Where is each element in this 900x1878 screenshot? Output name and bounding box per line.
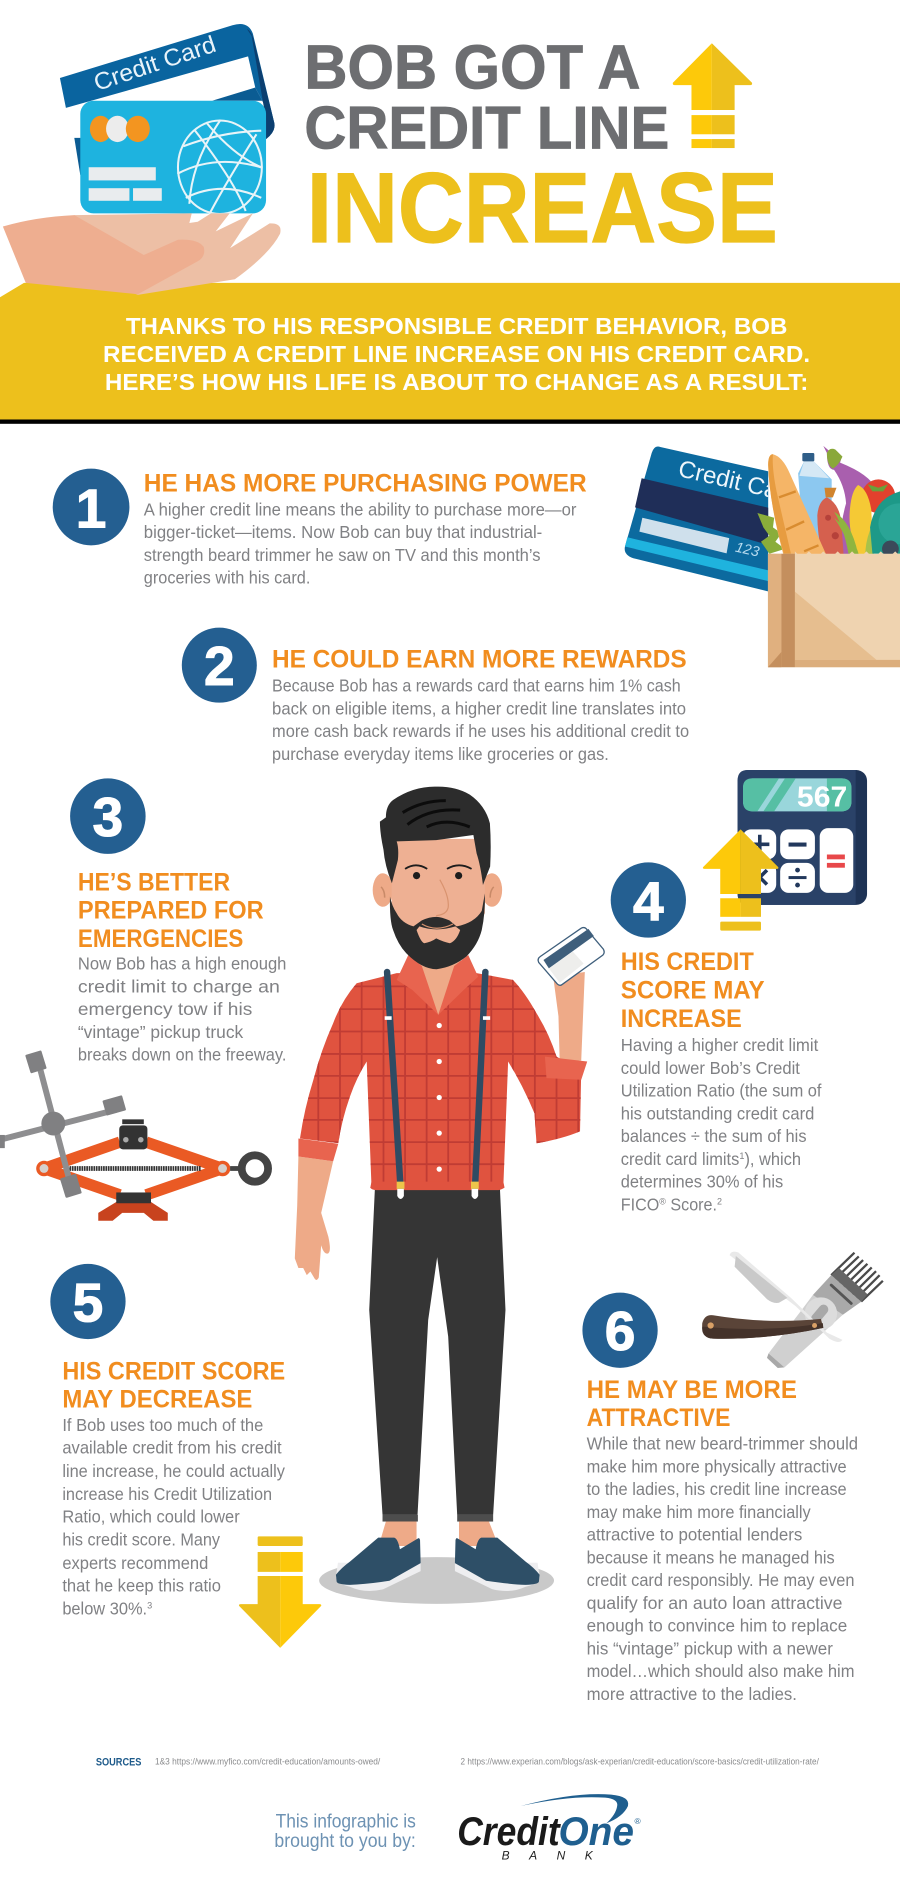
jack [36,1119,268,1221]
body text 6: model…which should also make him [587,1661,854,1681]
body text 1: groceries with his card. [144,568,310,588]
number badge 1: 1 [76,477,106,539]
nose [436,880,448,916]
body text 1: A higher credit line means the ability to purchase more—or [144,499,577,519]
heading 4: SCORE MAY [621,977,765,1004]
brought to you by: This infographic is [276,1811,416,1833]
title: BOB GOT A [304,34,641,103]
body text 5: increase his Credit Utilization [62,1484,272,1504]
sources [96,1756,819,1768]
body text 4: Score. [666,1194,717,1214]
body text 5: available credit from his credit [62,1438,282,1458]
panel: 3 emergencies [70,778,286,1065]
grocery credit card: Credit Card [676,455,801,509]
heading 4 [621,949,765,1033]
body text 4: Utilization Ratio (the sum of [621,1081,822,1101]
grocery credit card [624,446,768,592]
body text 5: below 30%. [62,1598,151,1618]
body text 6: more attractive to the ladies. [587,1684,797,1704]
body text 6: to the ladies, his credit line increase [587,1479,847,1499]
body text 4: 1 [739,1151,744,1162]
heading 6: HE MAY BE MORE [587,1377,797,1404]
body text 6: credit card responsibly. He may even [587,1570,854,1590]
body text 2: purchase everyday items like groceries or gas. [272,744,609,764]
body text 3: credit limit to charge an [78,976,280,996]
panel: 1 purchasing power [53,469,587,588]
body text 4: 2 [717,1196,722,1207]
neck [413,947,461,1015]
heading 6 [587,1377,797,1432]
icon: title up arrow [673,43,752,148]
logo: Credit One Bank: One [558,1810,634,1854]
body text 6: may make him more financially [587,1502,811,1522]
body text 5: If Bob uses too much of the [62,1415,263,1435]
heading 5: HIS CREDIT SCORE [62,1358,285,1385]
body text 4: his outstanding credit card [621,1103,814,1123]
razor [702,1252,842,1342]
body text 5: his credit score. Many [62,1530,220,1550]
icon: score up arrow [703,829,778,931]
body text 5: experts recommend [62,1553,208,1573]
body text 6 [587,1434,858,1704]
head [373,787,502,969]
number badge 3: 3 [93,786,123,848]
icon: razor and beard trimmer [702,1252,883,1368]
icon: calculator [738,770,867,905]
body text 4: FICO [621,1194,662,1214]
body text 2: back on eligible items, a higher credit line translates into [272,698,686,718]
icon: scissor jack and lug wrench [0,1050,268,1221]
logo: Credit One Bank: Credit [457,1810,561,1854]
intro text: HERE’S HOW HIS LIFE IS ABOUT TO CHANGE AS A RESULT: [105,369,808,395]
heading 6: ATTRACTIVE [587,1405,730,1432]
hand [3,213,281,295]
hair [380,787,491,885]
collar [397,955,478,1015]
heading 3: EMERGENCIES [78,926,243,953]
number badge 2: 2 [204,635,235,697]
body text 6: because it means he managed his [587,1547,835,1567]
sources: 2 https://www.experian.com/blogs/ask-experian/credit-education/score-basics/credit-utilization-rate/ [461,1757,819,1768]
heading 4: INCREASE [621,1006,742,1033]
body text 6: make him more physically attractive [587,1456,847,1476]
number badge 4: 4 [633,870,664,932]
body text 4: ® [659,1196,666,1207]
logo: Credit One Bank: BANK [502,1848,594,1862]
heading 1: HE HAS MORE PURCHASING POWER [144,470,587,497]
body text 2: Because Bob has a rewards card that earns him 1% cash [272,676,681,696]
number badge 4 [611,862,686,938]
body text 5: line increase, he could actually [62,1461,285,1481]
body text 3: emergency tow if his [78,999,252,1019]
grocery credit card: 123 [734,540,761,561]
beard [390,893,485,969]
grocery bag [768,551,900,667]
body text 1: bigger-ticket—items. Now Bob can buy that industrial- [144,522,542,542]
logo: Credit One Bank: ® [635,1816,642,1826]
plaid shirt [300,973,582,1190]
number badge 6 [582,1293,658,1368]
body text 5: that he keep this ratio [62,1576,221,1596]
suspenders [385,972,490,1199]
heading 5 [62,1358,285,1414]
panel: 2 rewards [182,628,689,764]
body text 4: could lower Bob’s Credit [621,1058,800,1078]
body text 3: breaks down on the freeway. [78,1045,286,1065]
body text 4: Having a higher credit limit [621,1035,819,1055]
number badge 5 [50,1264,126,1339]
trimmer [767,1253,883,1368]
body text 6: qualify for an auto loan attractive [587,1593,842,1613]
logo: Credit One Bank [457,1794,642,1862]
right arm [553,972,585,1061]
brought to you by [274,1811,416,1852]
back credit card [60,24,275,175]
illustration: Bob [288,787,604,1604]
groceries [757,446,900,557]
icon: score down arrow [239,1536,321,1648]
heading 3 [78,869,264,953]
shirt buttons [437,1023,442,1172]
heading 5: MAY DECREASE [62,1387,252,1414]
panel: 6 more attractive [582,1293,858,1704]
icon: credit card and grocery bag [625,446,900,667]
panel: 5 score may decrease [50,1264,285,1618]
card in hand [538,928,604,985]
number badge 6: 6 [605,1300,635,1362]
eyes [413,872,420,879]
body text 3: “vintage” pickup truck [78,1022,244,1042]
trousers [369,1184,505,1522]
body text 4: credit card limits [621,1149,744,1169]
body text 4 [621,1035,822,1214]
intro text: THANKS TO HIS RESPONSIBLE CREDIT BEHAVIOR, BOB [126,313,787,339]
body text 5: Ratio, which could lower [62,1507,240,1527]
header band [0,283,900,424]
body text 6: enough to convince him to replace [587,1616,847,1636]
icon: hand holding credit cards [3,24,281,295]
sources: 1&3 https://www.myfico.com/credit-education/amounts-owed/ [155,1757,381,1768]
body text 1 [144,499,577,588]
body text 4: balances ÷ the sum of his [621,1126,807,1146]
body text 6: attractive to potential lenders [587,1525,802,1545]
body text 5 [62,1415,285,1618]
heading 4: HIS CREDIT [621,949,754,976]
heading 3: HE’S BETTER [78,869,230,896]
body text 4: determines 30% of his [621,1172,783,1192]
title: INCREASE [307,153,778,264]
left arm [295,1157,333,1280]
body text 1: strength beard trimmer he saw on TV and this month’s [144,545,540,565]
body text 3 [78,954,286,1065]
title: CREDIT LINE [304,95,669,162]
brought to you by: brought to you by: [274,1830,416,1852]
front credit card [80,101,266,214]
left shoe [336,1538,421,1591]
shirt cuffs [298,1057,587,1161]
body text 6: While that new beard-trimmer should [587,1434,858,1454]
icon: calculator: 567 [797,782,847,814]
intro text [103,313,810,395]
right shoe [455,1538,540,1591]
number badge 5: 5 [73,1271,103,1333]
body text 5: 3 [147,1600,152,1611]
body text 2: more cash back rewards if he uses his additional credit to [272,721,689,741]
title [304,34,778,264]
intro text: RECEIVED A CREDIT LINE INCREASE ON HIS CREDIT CARD. [103,341,810,367]
number badge 3 [70,778,146,854]
panel: 4 score may increase [611,862,822,1214]
number badge 1 [53,469,129,545]
body text 4: ), which [744,1149,801,1169]
ankles [379,1522,499,1546]
back credit card: Credit Card [90,31,219,97]
floor shadow [319,1557,554,1604]
sources: SOURCES [96,1756,141,1768]
body text 3: Now Bob has a high enough [78,954,286,974]
body text 2 [272,676,689,764]
body text 6: his “vintage” pickup with a newer [587,1638,833,1658]
wrench [0,1050,126,1198]
heading 2: HE COULD EARN MORE REWARDS [272,647,687,674]
number badge 2 [182,628,257,703]
heading 3: PREPARED FOR [78,898,264,925]
